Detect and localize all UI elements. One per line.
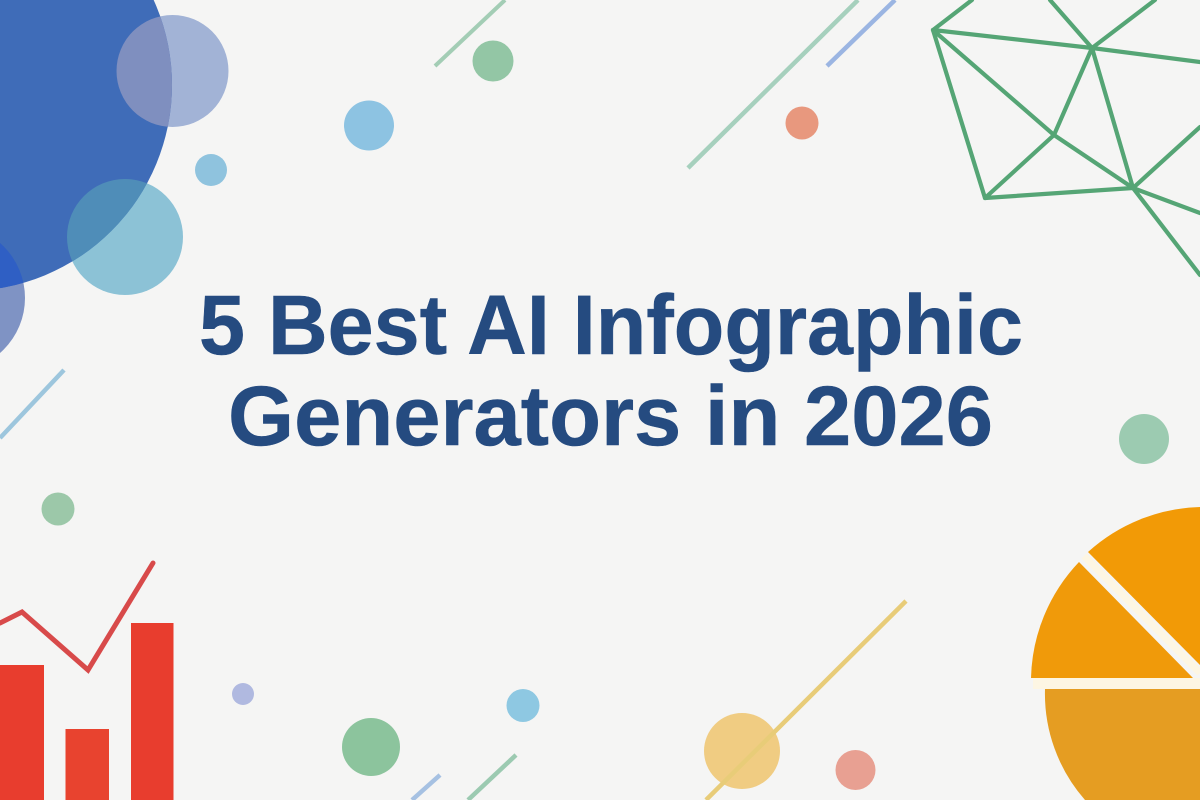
icon: blue overlapping circles, top left bbox=[0, 0, 228, 371]
title bbox=[199, 278, 1023, 463]
bar chart with trend line, bottom left bbox=[0, 563, 174, 800]
title line 2: Generators in 2026 bbox=[228, 369, 993, 463]
icon: green network diagram, top right bbox=[933, 0, 1200, 275]
pie chart, bottom right bbox=[1031, 507, 1200, 800]
title line 1: 5 Best AI Infographic bbox=[199, 278, 1023, 372]
decorative dots and lines, top centre bbox=[344, 0, 895, 168]
decorative dots and line, left and right edges bbox=[0, 370, 1169, 526]
decorative dots and lines, bottom centre bbox=[232, 601, 906, 800]
